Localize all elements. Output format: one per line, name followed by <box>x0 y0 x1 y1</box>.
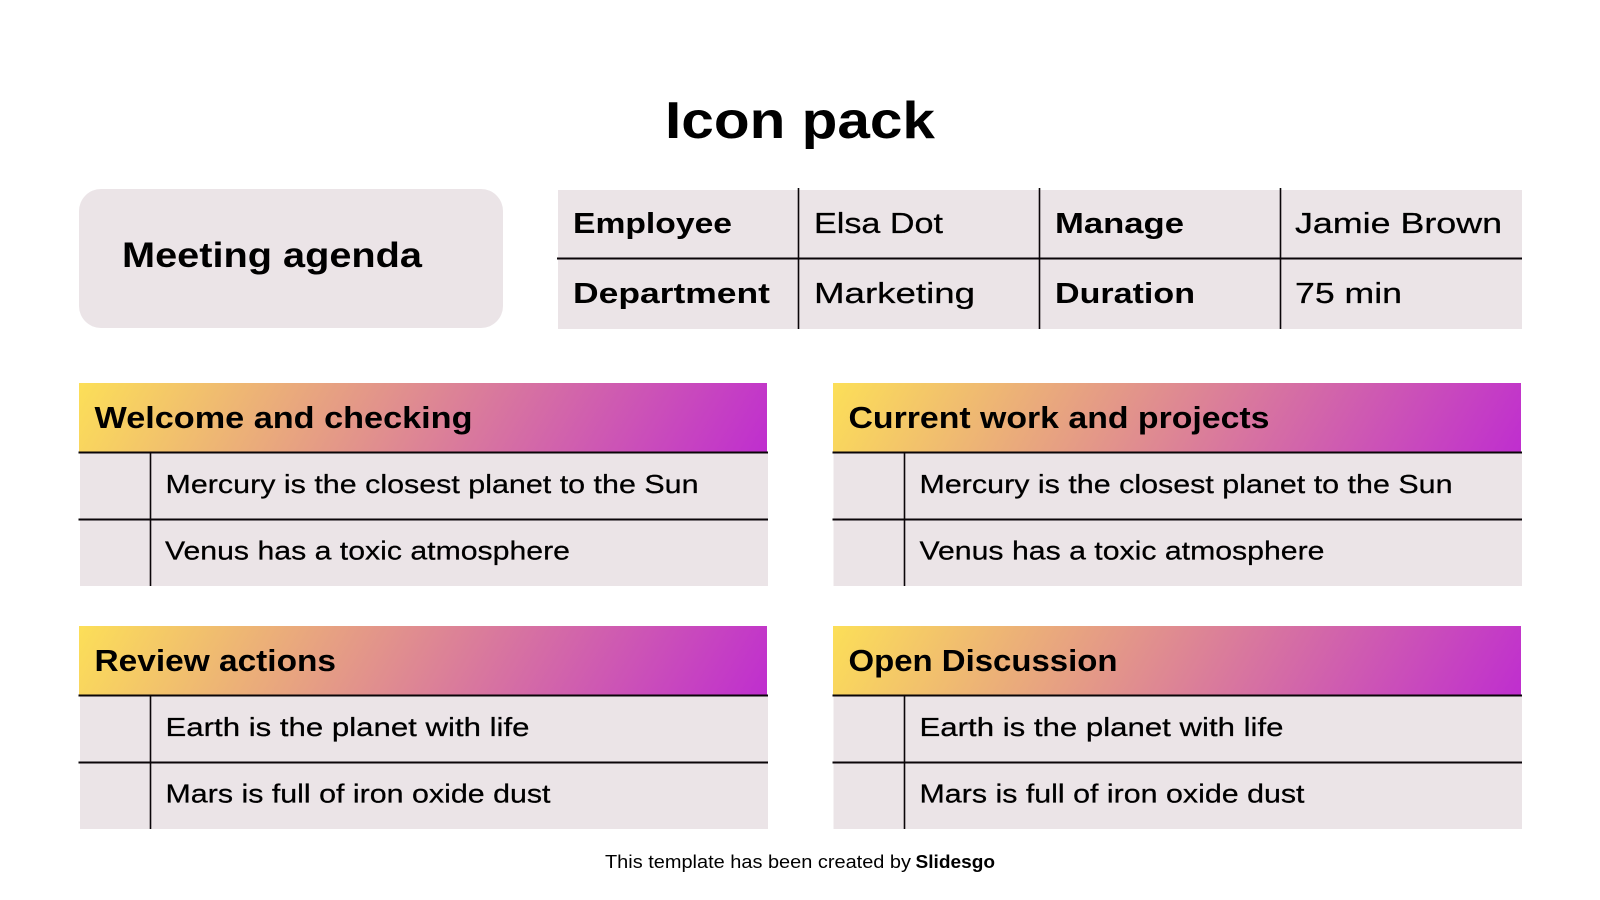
panel: open discussion <box>832 626 1522 829</box>
panel: current work and projects <box>832 383 1522 586</box>
item: venus: Venus has a toxic atmosphere <box>165 536 570 566</box>
panel: welcome and checking <box>78 383 768 586</box>
heading: current work and projects: Current work and projects <box>848 400 1270 435</box>
title: Icon pack <box>665 92 935 150</box>
panel: meeting details table <box>557 188 1522 329</box>
item: mercury: Mercury is the closest planet to the Sun <box>166 469 698 499</box>
item: earth: Earth is the planet with life <box>920 712 1284 742</box>
label: department: Department <box>573 278 770 310</box>
value: duration time: 75 min <box>1295 278 1402 310</box>
heading: open discussion: Open Discussion <box>848 643 1118 678</box>
footer credit: This template has been created by <box>605 852 911 872</box>
item: mars: Mars is full of iron oxide dust <box>166 778 551 808</box>
label: manage: Manage <box>1055 208 1184 240</box>
value: department name: Marketing <box>814 278 975 310</box>
panel: meeting agenda <box>79 189 503 328</box>
item: earth: Earth is the planet with life <box>166 712 530 742</box>
footer credit: Slidesgo <box>916 852 995 872</box>
item: mars: Mars is full of iron oxide dust <box>920 778 1305 808</box>
heading: meeting agenda: Meeting agenda <box>122 236 423 275</box>
heading: welcome and checking: Welcome and checking <box>94 400 472 435</box>
item: mercury: Mercury is the closest planet to the Sun <box>920 469 1452 499</box>
value: manager name: Jamie Brown <box>1295 208 1502 240</box>
value: employee name: Elsa Dot <box>814 208 943 240</box>
label: employee: Employee <box>573 208 732 240</box>
heading: review actions: Review actions <box>94 643 336 678</box>
label: duration: Duration <box>1055 278 1195 310</box>
panel: review actions <box>78 626 768 829</box>
item: venus: Venus has a toxic atmosphere <box>920 536 1324 566</box>
